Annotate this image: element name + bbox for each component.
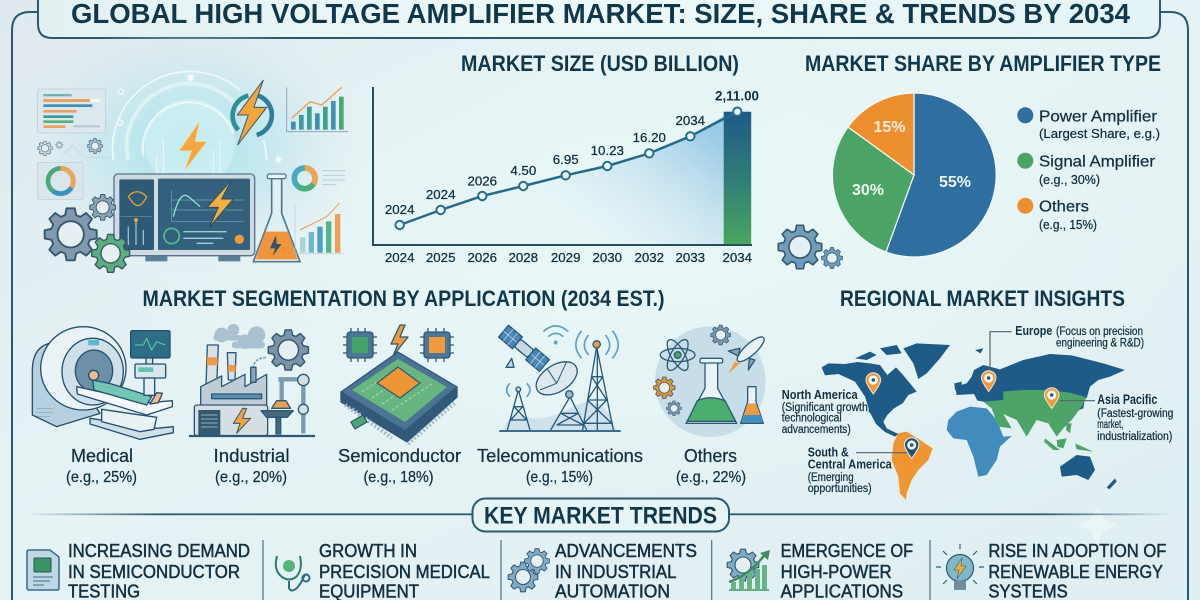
trend: industrial automation: IN INDUSTRIAL	[555, 562, 676, 582]
line and bar chart: market size: 2029	[551, 250, 580, 265]
donut panel	[37, 162, 83, 200]
pin: Europe	[981, 371, 996, 392]
icon: science collage	[654, 325, 767, 437]
small gears row	[38, 138, 110, 157]
trend: semiconductor testing: IN SEMICONDUCTOR	[68, 562, 240, 582]
label: Asia Pacific: (Fastest-growing	[1097, 408, 1173, 420]
sparkle	[1077, 505, 1118, 545]
pin: North America	[866, 373, 881, 394]
line and bar chart: market size: 2026	[468, 174, 497, 189]
legend: amplifier type: (e.g., 30%)	[1039, 172, 1100, 187]
icon: telecom towers and satellite	[499, 325, 621, 431]
label: Asia Pacific	[1097, 392, 1173, 443]
segment: industrial	[189, 324, 315, 486]
heading: regional: REGIONAL MARKET INSIGHTS	[840, 286, 1125, 311]
line and bar chart: market size: 6.95	[553, 152, 579, 167]
label: South and Central America: (Emerging	[808, 472, 854, 484]
segment: others	[654, 325, 767, 486]
label: South and Central America: South &	[808, 445, 849, 460]
line and bar chart: market size: 4.50	[510, 163, 536, 178]
line and bar chart: market size: 2024	[385, 202, 414, 217]
label: North America	[782, 387, 871, 436]
label: telecommunications: Telecommunications	[477, 446, 643, 466]
bar chart top right	[287, 87, 348, 132]
trend dividers	[263, 540, 930, 600]
segment: semiconductor: (e.g., 18%)	[364, 469, 434, 486]
segment: others: (e.g., 22%)	[676, 469, 746, 486]
amplifier device	[114, 174, 255, 261]
label: Europe: Europe	[1015, 323, 1052, 338]
label: semiconductor: Semiconductor	[338, 446, 461, 466]
icon: chip	[341, 325, 457, 444]
label: Asia Pacific: Asia Pacific	[1097, 392, 1158, 407]
pie chart: market share	[832, 93, 996, 257]
label: North America: North America	[782, 387, 858, 402]
pie chart: market share: 55%	[939, 174, 971, 191]
icon: gears	[508, 549, 549, 592]
label: North America: advancements)	[782, 424, 851, 436]
pie chart: market share: 15%	[873, 119, 906, 136]
label: South and Central America: opportunities)	[808, 483, 872, 495]
label: South and Central America	[808, 445, 892, 495]
label: industrial: Industrial	[214, 446, 290, 466]
icon: document with chip	[27, 550, 59, 590]
icon: growth chart with gear	[727, 549, 770, 590]
line and bar chart: market size: 2024	[385, 250, 414, 265]
trend: high-power applications: EMERGENCE OF	[781, 541, 913, 561]
heading: market size: MARKET SIZE (USD BILLION)	[461, 51, 739, 76]
legend: amplifier type: Signal Amplifier	[1039, 154, 1156, 171]
line and bar chart: market size: 2026	[468, 250, 497, 265]
gear cluster	[45, 194, 130, 272]
line and bar chart: market size: 2024	[426, 187, 455, 202]
bar chart lower right	[295, 203, 344, 253]
trend: high-power applications	[727, 541, 913, 600]
segment: medical: (e.g., 25%)	[66, 469, 137, 486]
center lightning bolt	[179, 122, 207, 170]
label: others: Others	[684, 446, 737, 466]
key market trends heading: KEY MARKET TRENDS	[484, 502, 717, 529]
segment: semiconductor	[338, 325, 461, 486]
line and bar chart: market size	[373, 87, 759, 265]
trend: renewable energy: RISE IN ADOPTION OF	[988, 541, 1166, 561]
label: Asia Pacific: industrialization)	[1097, 431, 1172, 443]
line and bar chart: market size: 16.20	[633, 130, 666, 145]
label: Asia Pacific: market,	[1097, 419, 1123, 431]
trend: renewable energy: RENEWABLE ENERGY	[988, 562, 1163, 582]
line and bar chart: market size: 2034	[676, 113, 705, 128]
trend: precision medical: GROWTH IN	[319, 541, 417, 561]
trend: industrial automation: ADVANCEMENTS	[555, 541, 697, 561]
line and bar chart: market size: 2030	[593, 250, 622, 265]
label: North America: (Significant growth,	[782, 402, 871, 414]
line and bar chart: market size: 2032	[635, 250, 664, 265]
hero illustration: high voltage amplifier	[17, 20, 363, 273]
label: Europe: engineering & R&D)	[1056, 338, 1144, 350]
donut and list right	[294, 168, 345, 189]
icon: decorative gears	[778, 225, 842, 269]
pie chart: market share: 30%	[852, 182, 884, 199]
icon: stethoscope	[276, 556, 310, 590]
legend: amplifier type	[1017, 107, 1160, 232]
map shapes	[822, 343, 1125, 500]
regional world map	[782, 323, 1173, 500]
legend: amplifier type: Power Amplifier	[1039, 109, 1158, 126]
line and bar chart: market size: 2025	[426, 250, 455, 265]
flask with bolt	[253, 174, 300, 262]
circuit arcs	[113, 72, 281, 173]
trend: renewable energy	[936, 541, 1166, 600]
legend: amplifier type: (e.g., 15%)	[1039, 217, 1097, 232]
legend: amplifier type: Others	[1039, 199, 1089, 216]
ring with bolt	[233, 80, 272, 145]
trend: industrial automation	[508, 541, 697, 600]
legend: amplifier type: (Largest Share, e.g.)	[1039, 126, 1160, 141]
line and bar chart: market size: 10.23	[591, 143, 624, 158]
segment: industrial: (e.g., 20%)	[215, 469, 287, 486]
line and bar chart: market size: 2,11.00	[715, 88, 759, 104]
label: Europe: (Focus on precision	[1056, 326, 1143, 338]
heading: market share: MARKET SHARE BY AMPLIFIER TYPE	[805, 51, 1161, 76]
heading: segmentation: MARKET SEGMENTATION BY APPLICATION (2034 EST.)	[142, 286, 664, 311]
trend: precision medical: PRECISION MEDICAL	[319, 562, 490, 582]
label: Europe	[1015, 323, 1144, 350]
trend: high-power applications: HIGH-POWER	[781, 562, 892, 582]
segment: telecommunications	[477, 325, 643, 486]
leader lines	[856, 332, 1095, 453]
label: North America: technological	[782, 413, 842, 425]
icon: MRI scanner	[32, 327, 173, 439]
pin: Asia Pacific	[1044, 388, 1059, 408]
line and bar chart: market size: 2028	[509, 250, 538, 265]
segment: medical	[32, 327, 173, 486]
list panel	[37, 89, 106, 133]
icon: light bulb	[936, 544, 984, 590]
icon: factory	[189, 324, 315, 436]
segment: telecommunications: (e.g., 15%)	[526, 469, 593, 486]
line and bar chart: market size: 2034	[723, 250, 752, 265]
trend: semiconductor testing	[27, 541, 250, 600]
line and bar chart: market size: 2033	[676, 250, 705, 265]
trend: precision medical	[276, 541, 490, 600]
key market trends heading	[25, 498, 1174, 532]
label: South and Central America: Central America	[808, 457, 892, 472]
trend: semiconductor testing: INCREASING DEMAND	[68, 541, 250, 561]
label: medical: Medical	[71, 446, 133, 466]
pin: South America	[904, 438, 919, 458]
